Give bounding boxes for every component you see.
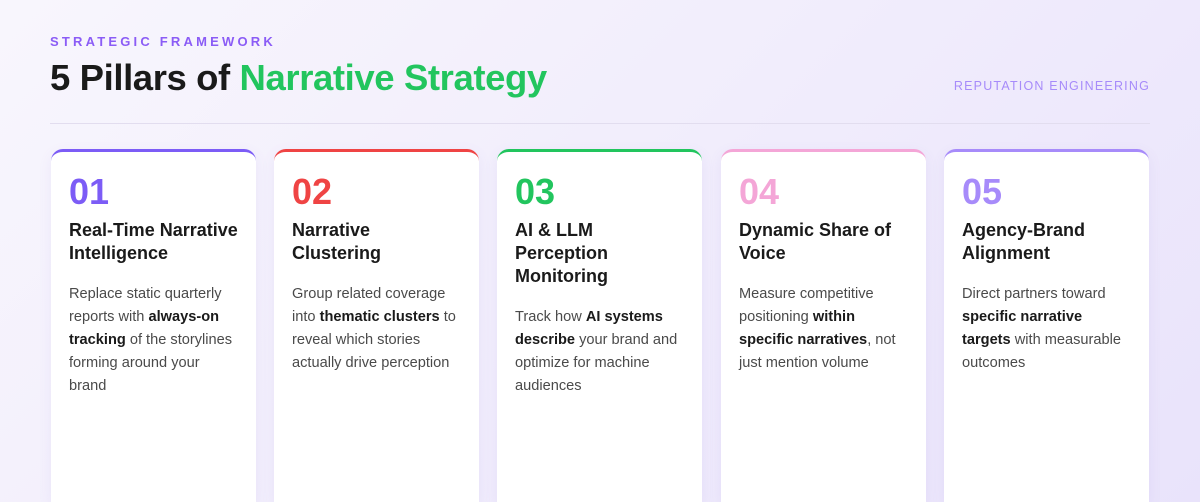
eyebrow label: STRATEGIC FRAMEWORK bbox=[50, 34, 276, 49]
text 03: Track how AI systems describe your brand and optimize for machine audiences bbox=[515, 309, 677, 394]
heading 01: Real-Time Narrative Intelligence bbox=[69, 220, 238, 263]
panel: pillar 03 bbox=[497, 149, 702, 502]
number 01: 01 bbox=[69, 171, 109, 212]
number 04: 04 bbox=[739, 171, 779, 212]
tag: reputation engineering: REPUTATION ENGINEERING bbox=[954, 79, 1150, 93]
heading 03: AI & LLM Perception Monitoring bbox=[515, 220, 608, 286]
heading 04: Dynamic Share of Voice bbox=[739, 220, 891, 263]
panel: pillar 04 bbox=[721, 149, 926, 502]
panel: pillar 01 bbox=[51, 149, 256, 502]
text 01: Replace static quarterly reports with always-on tracking of the storylines forming around your brand bbox=[69, 286, 232, 394]
heading 02: Narrative Clustering bbox=[292, 220, 381, 263]
number 02: 02 bbox=[292, 171, 332, 212]
number 03: 03 bbox=[515, 171, 555, 212]
panel: pillar 02 bbox=[274, 149, 479, 502]
title: 5 Pillars of Narrative Strategy bbox=[50, 57, 547, 98]
number 05: 05 bbox=[962, 171, 1002, 212]
text 05: Direct partners toward specific narrative targets with measurable outcomes bbox=[962, 286, 1121, 371]
text 04: Measure competitive positioning within specific narratives, not just mention volume bbox=[739, 286, 896, 371]
heading 05: Agency-Brand Alignment bbox=[962, 220, 1085, 263]
panel: pillar 05 bbox=[944, 149, 1149, 502]
text 02: Group related coverage into thematic clusters to reveal which stories actually drive perception bbox=[292, 286, 456, 371]
